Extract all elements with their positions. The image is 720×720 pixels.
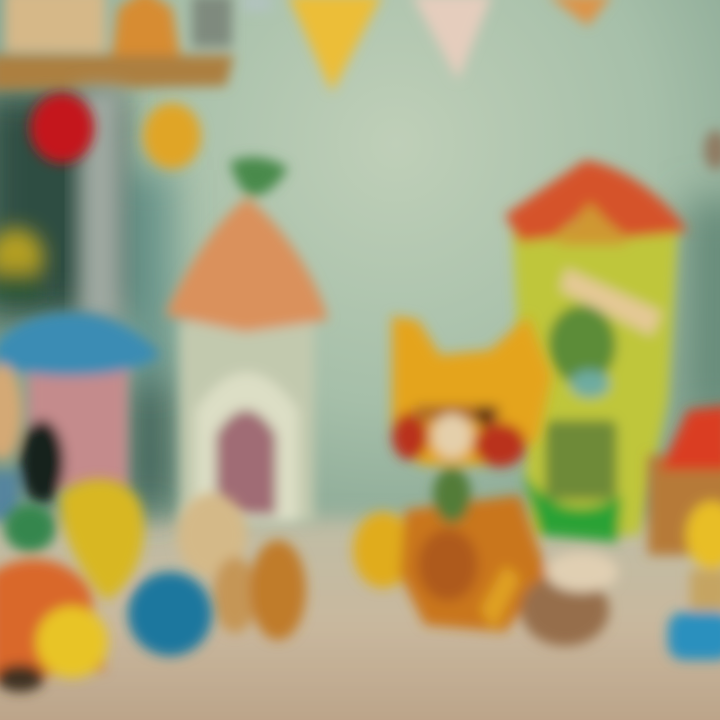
house body — [512, 225, 678, 535]
left paw — [353, 512, 413, 588]
central tower — [165, 157, 328, 522]
left tan figure — [0, 364, 22, 460]
car yellow wheel — [36, 606, 108, 678]
body — [400, 495, 548, 632]
hanging yellow ball — [143, 103, 201, 169]
tower door — [216, 410, 276, 515]
tower green finial — [230, 157, 288, 196]
flag: pale pink — [412, 0, 492, 80]
right green house — [505, 160, 688, 542]
lower window area — [545, 420, 617, 500]
wall shade right — [685, 200, 720, 420]
wall knob — [704, 130, 720, 170]
blue roof house — [0, 312, 160, 520]
chest dark — [418, 529, 478, 601]
orange car — [0, 559, 105, 680]
head — [392, 316, 552, 465]
bunting flags — [242, 0, 612, 92]
shelf with toys — [0, 0, 234, 90]
far right red toy — [648, 130, 720, 660]
eye band — [415, 405, 500, 421]
blue block — [668, 612, 720, 660]
body highlight — [480, 565, 520, 630]
house base bright green — [522, 470, 622, 542]
shelf toy: orange block — [112, 0, 180, 56]
dark doorway — [20, 420, 64, 504]
shelf plank — [0, 55, 234, 90]
small brown bear toys — [177, 493, 306, 640]
left dark backdrop — [0, 90, 170, 510]
car dark wheel shadow — [0, 664, 44, 692]
tower body — [180, 322, 314, 522]
toy body — [648, 455, 720, 555]
flag: orange — [548, 0, 612, 26]
toy red roof — [660, 405, 720, 470]
roof yellow gable — [555, 202, 628, 245]
green ball — [4, 504, 56, 552]
cat toy — [353, 316, 618, 646]
foreground left toys — [0, 479, 212, 692]
tan stem — [690, 570, 720, 610]
blue roof — [0, 312, 160, 376]
yellow duck — [60, 479, 144, 600]
cream stripe — [560, 268, 662, 336]
pink house body — [28, 370, 128, 490]
brown bear — [250, 540, 306, 640]
upper window — [548, 305, 616, 385]
floor — [0, 518, 720, 720]
cream bear body — [213, 557, 257, 633]
right eye — [475, 406, 495, 426]
right foot — [521, 574, 609, 646]
green collar — [433, 467, 471, 523]
muzzle — [432, 414, 472, 458]
hanging small green-yellow ornament — [0, 228, 44, 296]
blue ball — [128, 572, 212, 656]
right cheek — [474, 423, 526, 467]
shelf toy: cream block — [5, 0, 105, 52]
yellow blob — [686, 501, 720, 569]
window blue glint — [570, 370, 610, 398]
flag: small muted — [242, 0, 272, 11]
tail cream — [546, 552, 618, 592]
cream bear — [177, 493, 247, 577]
left blue patch — [0, 472, 18, 520]
tower door frame — [196, 372, 298, 522]
hanging post — [78, 88, 122, 323]
red roof — [505, 160, 688, 242]
hanging red ball — [30, 93, 94, 163]
left cheek — [392, 412, 428, 460]
tower roof — [165, 198, 328, 332]
flag: yellow — [288, 0, 382, 92]
shelf toy: slate block — [192, 0, 232, 47]
